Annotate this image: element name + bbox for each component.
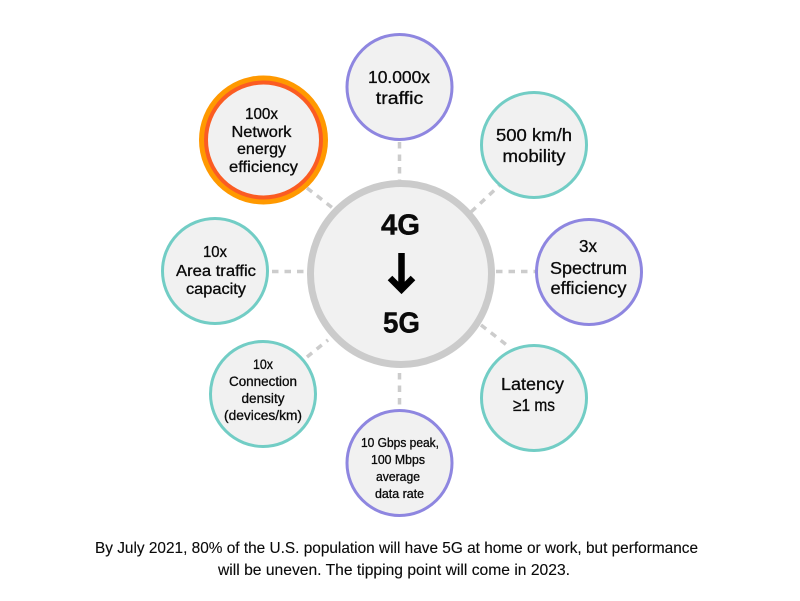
node: data rate: average — [376, 470, 420, 484]
node: traffic: 10.000x — [368, 67, 430, 87]
node: spectrum efficiency: efficiency — [550, 278, 627, 298]
node: network energy efficiency (highlighted): 100x — [245, 106, 278, 123]
icon: down arrow — [390, 253, 413, 290]
label: 5G: 5G — [383, 308, 420, 340]
node: latency: Latency — [501, 374, 564, 394]
caption — [95, 540, 698, 579]
node: spectrum efficiency: Spectrum — [550, 258, 627, 278]
node: latency: ≥1 ms — [513, 395, 555, 415]
hub: 4G to 5G — [310, 184, 492, 364]
node: mobility: 500 km/h — [496, 125, 572, 145]
node: traffic: traffic — [376, 88, 424, 108]
node: traffic — [347, 34, 452, 140]
node: network energy efficiency (highlighted) — [199, 76, 328, 204]
node: area traffic capacity: capacity — [186, 281, 246, 298]
node: area traffic capacity: Area traffic — [176, 263, 256, 280]
node: data rate: 10 Gbps peak, — [361, 436, 439, 450]
node: mobility: mobility — [502, 146, 566, 166]
node: connection density: 10x — [253, 357, 273, 372]
node: spectrum efficiency: 3x — [579, 236, 597, 256]
caption: will be uneven. The tipping point will come in 2023. — [217, 562, 570, 579]
node: data rate — [347, 410, 452, 516]
node: area traffic capacity: 10x — [203, 244, 227, 261]
node: data rate: 100 Mbps — [371, 453, 425, 467]
node: connection density: density — [242, 391, 285, 406]
node: network energy efficiency (highlighted): Network — [232, 124, 292, 141]
node: network energy efficiency (highlighted): efficiency — [229, 159, 298, 176]
node: spectrum efficiency — [536, 220, 642, 324]
node: area traffic capacity — [162, 218, 268, 324]
label: 4G: 4G — [381, 210, 420, 242]
node: mobility — [482, 92, 586, 198]
node: latency — [482, 346, 586, 450]
caption: By July 2021, 80% of the U.S. population will have 5G at home or work, but performance — [95, 540, 698, 557]
node: network energy efficiency (highlighted): energy — [237, 141, 286, 158]
node: data rate: data rate — [375, 487, 424, 501]
node: connection density — [210, 342, 316, 446]
node: connection density: (devices/km) — [224, 408, 302, 423]
node: connection density: Connection — [229, 374, 297, 389]
